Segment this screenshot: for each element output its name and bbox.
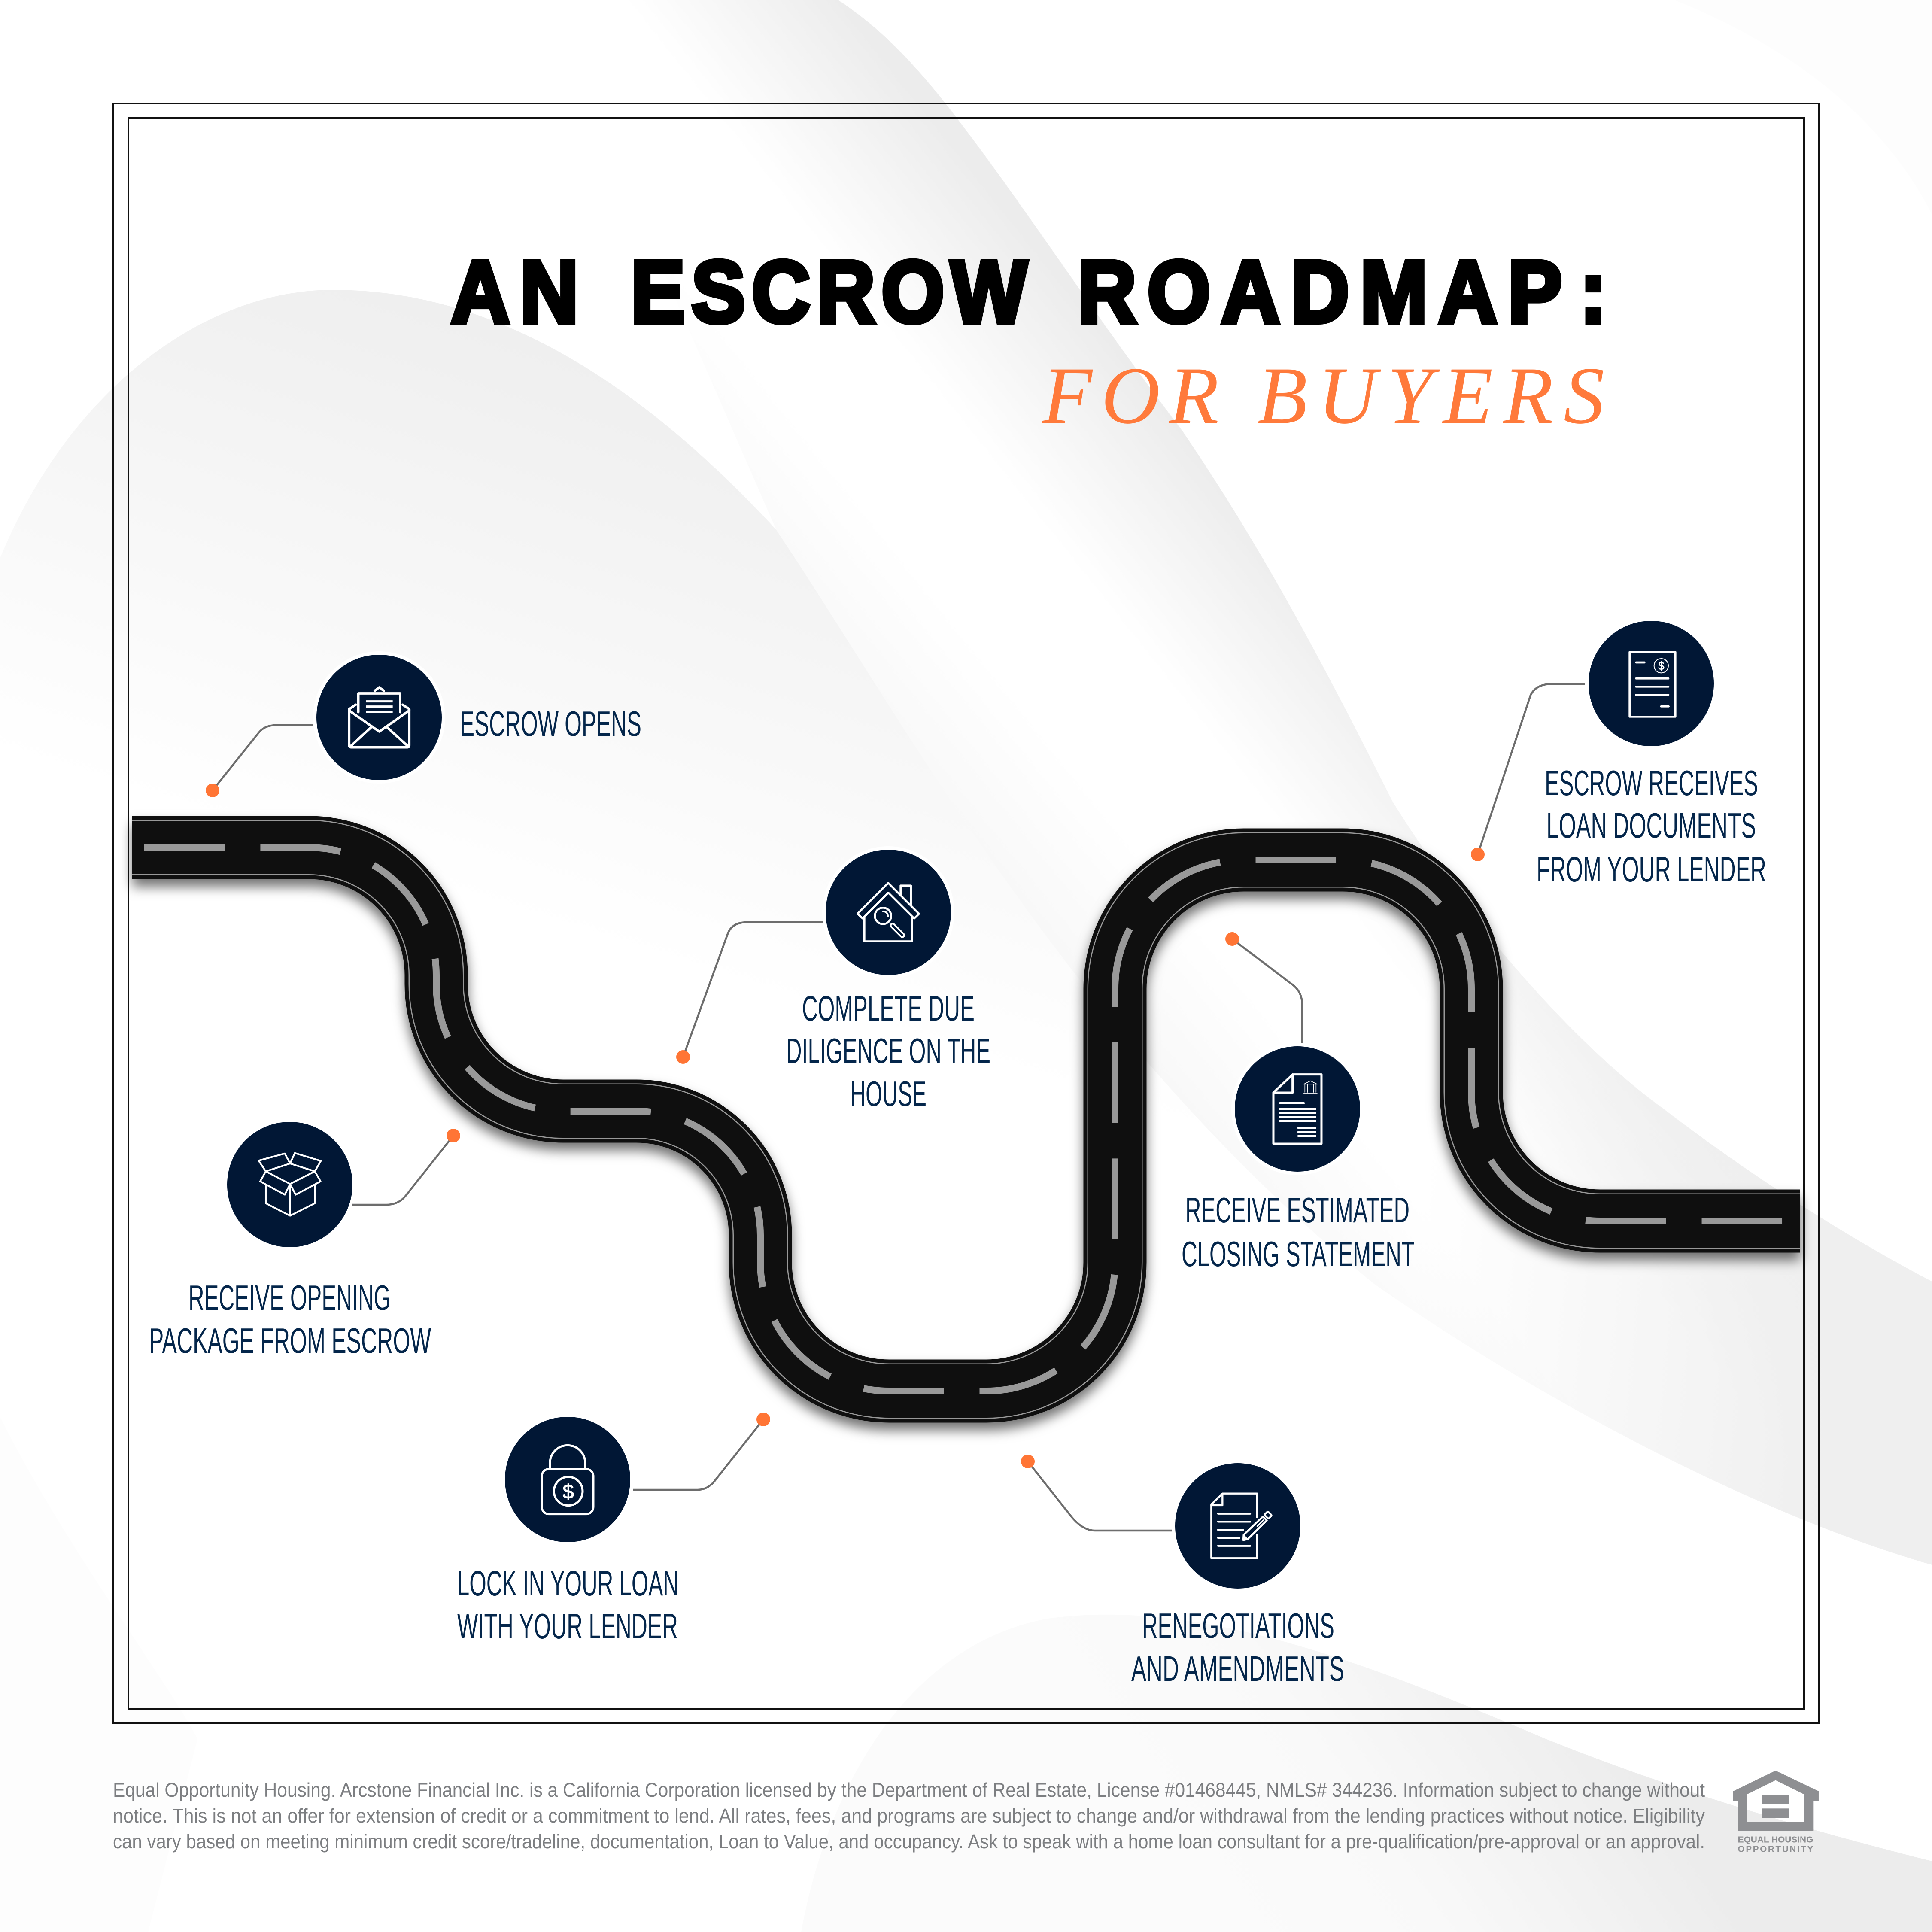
- step: renegotiations and amendments: [1021, 1455, 1344, 1689]
- legal disclaimer: notice. This is not an offer for extension of credit or a commitment to lend. All rates, fees, and programs are subject to change and/or withdrawal from the lending practices without notice. Eligibility: [113, 1804, 1705, 1827]
- step: lock in your loan: [457, 1413, 770, 1646]
- step: receive estimated closing statement: CLOSING STATEMENT: [1182, 1234, 1415, 1274]
- icon: padlock with dollar: [542, 1445, 593, 1514]
- icon: document with pen: [1211, 1494, 1272, 1558]
- step: escrow receives loan documents: [1471, 621, 1766, 889]
- winding road: [132, 848, 1800, 1391]
- step: receive estimated closing statement: RECEIVE ESTIMATED: [1185, 1190, 1410, 1230]
- title: [451, 243, 1607, 341]
- logo: equal housing opportunity: EQUAL HOUSING: [1738, 1835, 1813, 1845]
- icon: house with magnifier: [857, 883, 919, 942]
- step: receive opening package: [149, 1122, 460, 1361]
- legal disclaimer: can vary based on meeting minimum credit score/tradeline, documentation, Loan to Value, and occupancy. Ask to speak with a home loan consultant for a pre-qualification/pre-approval or an approval.: [113, 1830, 1705, 1853]
- subtitle: [1042, 351, 1604, 441]
- step: renegotiations and amendments: AND AMENDMENTS: [1131, 1649, 1344, 1689]
- step: complete due diligence: COMPLETE DUE: [802, 988, 975, 1028]
- step: lock in your loan: WITH YOUR LENDER: [457, 1606, 678, 1646]
- double frame border: [113, 103, 1819, 1723]
- icon: invoice document: $: [1658, 659, 1665, 672]
- step: escrow receives loan documents: LOAN DOCUMENTS: [1546, 805, 1756, 845]
- title: ROADMAP: [1078, 243, 1562, 341]
- step: complete due diligence: [676, 846, 990, 1114]
- icon: open box: [258, 1153, 321, 1216]
- subtitle: BUYERS: [1258, 351, 1604, 441]
- icon: invoice document: [1630, 652, 1675, 717]
- logo: equal housing opportunity: OPPORTUNITY: [1738, 1844, 1814, 1854]
- subtitle: FOR: [1042, 351, 1219, 441]
- icon: statement document with bank: [1273, 1075, 1321, 1144]
- legal disclaimer: Equal Opportunity Housing. Arcstone Financial Inc. is a California Corporation licensed by the Department of Real Estate, License #01468445, NMLS# 344236. Information subject to change without: [113, 1779, 1705, 1801]
- logo: equal housing opportunity: [1733, 1771, 1819, 1854]
- step: lock in your loan: LOCK IN YOUR LOAN: [457, 1563, 679, 1603]
- icon: open envelope: [349, 687, 409, 747]
- step: renegotiations and amendments: RENEGOTIATIONS: [1142, 1606, 1334, 1646]
- step: receive opening package: RECEIVE OPENING: [188, 1278, 391, 1318]
- step: receive estimated closing statement: [1182, 932, 1415, 1274]
- icon: padlock with dollar: $: [563, 1480, 574, 1503]
- step: escrow receives loan documents: FROM YOUR LENDER: [1537, 849, 1766, 889]
- title: :: [1580, 243, 1607, 341]
- title: AN: [451, 243, 578, 341]
- step: escrow receives loan documents: ESCROW RECEIVES: [1545, 763, 1758, 803]
- step: complete due diligence: HOUSE: [850, 1074, 927, 1114]
- legal disclaimer: [113, 1779, 1705, 1853]
- title: ESCROW: [631, 243, 1027, 341]
- step: escrow opens: [206, 651, 641, 797]
- step: escrow opens: ESCROW OPENS: [460, 704, 641, 744]
- step: complete due diligence: DILIGENCE ON THE: [786, 1031, 990, 1071]
- step: receive opening package: PACKAGE FROM ESCROW: [149, 1321, 431, 1361]
